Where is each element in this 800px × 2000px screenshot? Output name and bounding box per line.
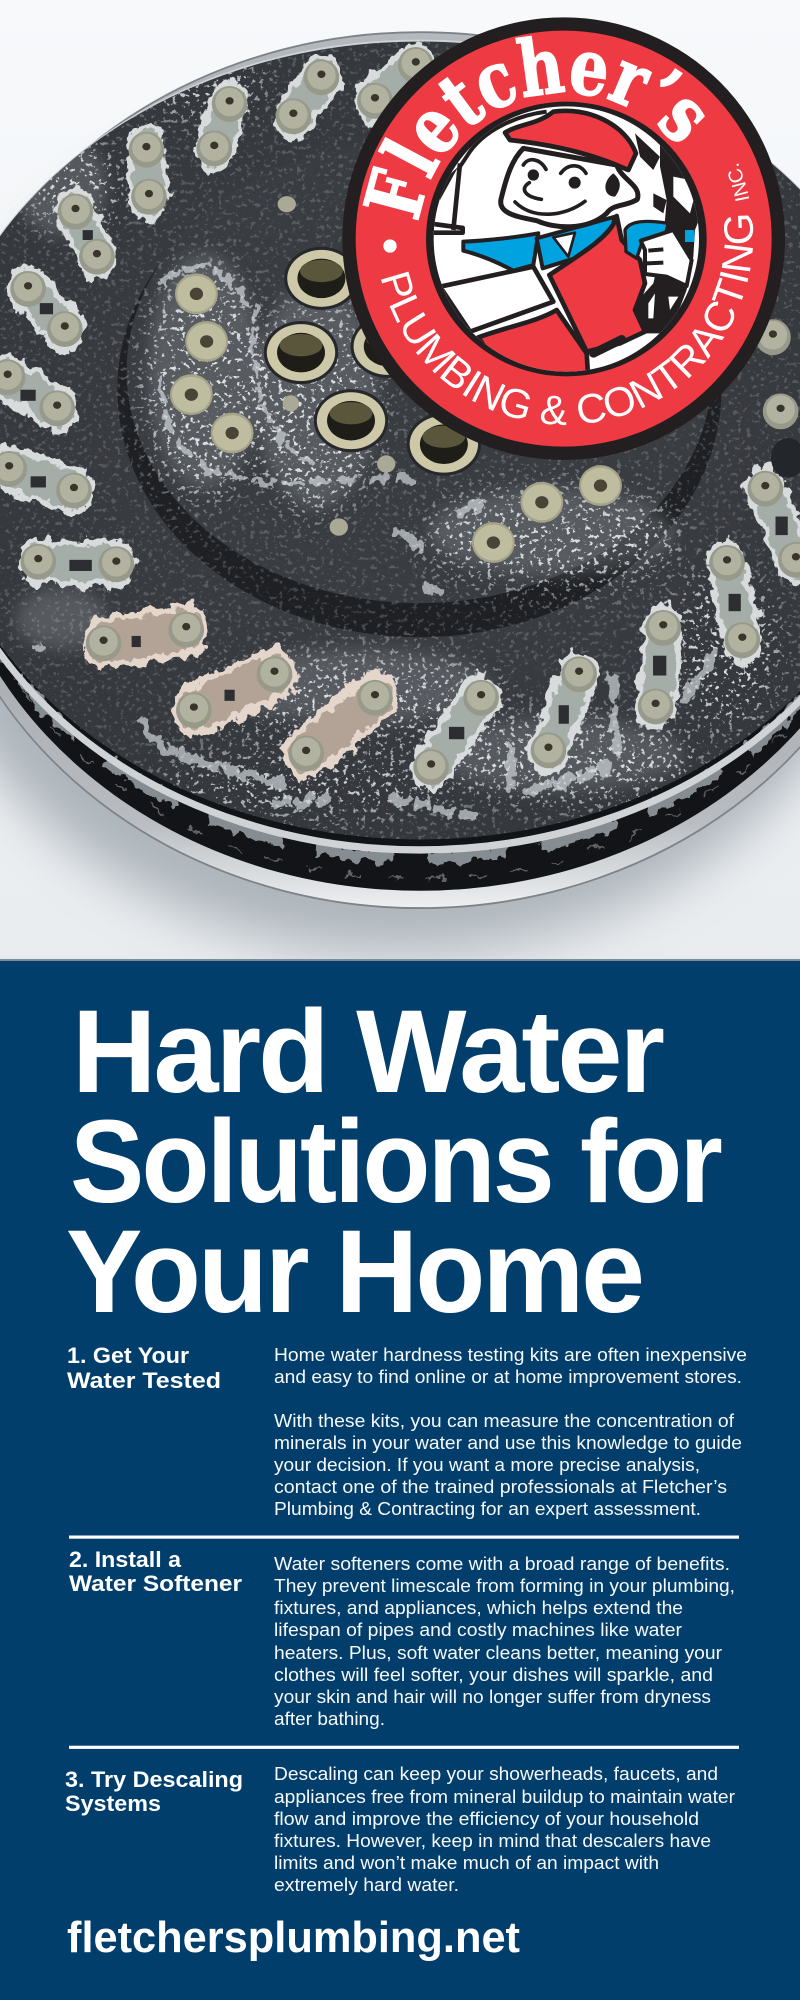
tab centre slots — [20, 230, 788, 739]
section 2 body text: lifespan of pipes and costly machines like water — [274, 1620, 682, 1640]
title — [66, 986, 722, 1338]
section 2 body text — [274, 1554, 735, 1729]
section 2 heading — [69, 1547, 242, 1596]
pale rim line — [0, 43, 800, 850]
mascot head — [501, 148, 638, 227]
section 1 body text: minerals in your water and use this knowledge to guide — [274, 1433, 742, 1453]
soft limescale haze — [15, 136, 684, 792]
Inc. small text: INC. — [728, 164, 749, 201]
section 2 heading: Water Softener — [69, 1571, 242, 1596]
section 3 body text: Descaling can keep your showerheads, faucets, and — [274, 1764, 718, 1784]
raised centre disc side — [117, 142, 721, 637]
section 1 body text: and easy to find online or at home improvement stores. — [274, 1367, 742, 1387]
mascot shoulder — [433, 163, 463, 233]
badge black outer ring — [342, 17, 785, 460]
mascot ear — [605, 173, 620, 197]
mascot arm upper — [460, 112, 547, 167]
dark nozzle at right edge — [771, 438, 800, 478]
mascot blue shirt left — [463, 233, 538, 271]
section 2 body text: clothes will feel softer, your dishes will sparkle, and — [274, 1665, 713, 1685]
section 2 body text: heaters. Plus, soft water cleans better, meaning your — [274, 1643, 722, 1663]
Plumbing & Contracting arched text: PLUMBING & CONTRACTING — [381, 216, 754, 426]
showerhead drawing — [0, 0, 800, 953]
section 3 heading: 3. Try Descaling — [65, 1767, 243, 1792]
showerhead face — [0, 41, 800, 839]
limescale speckle — [0, 0, 800, 866]
section 1 heading: 1. Get Your — [67, 1343, 189, 1368]
section 2 body text: They prevent limescale from forming in your plumbing, — [274, 1576, 735, 1596]
cast shadow — [0, 111, 800, 953]
mascot overalls — [549, 216, 645, 352]
mascot hand — [641, 230, 692, 286]
section 3 body text: flow and improve the efficiency of your household — [274, 1809, 699, 1829]
mascot hat — [505, 111, 636, 170]
mascot foot — [593, 339, 622, 353]
section 1 body text: Home water hardness testing kits are often inexpensive — [274, 1345, 747, 1365]
section 2 body text: your skin and hair will no longer suffer from dryness — [274, 1687, 711, 1707]
tiny pin nozzles — [278, 196, 395, 536]
mascot pants — [478, 310, 588, 380]
section 3 body text: extremely hard water. — [274, 1875, 459, 1895]
large spray holes — [264, 247, 481, 476]
mascot collar — [537, 217, 615, 268]
divider 1 — [69, 1536, 739, 1539]
section 3 heading — [65, 1767, 243, 1816]
nozzles — [0, 47, 800, 785]
section 1 heading — [67, 1343, 221, 1393]
photo background — [0, 0, 800, 970]
mascot wrench — [638, 145, 698, 334]
section 2 body text: after bathing. — [274, 1709, 385, 1729]
section 2 body text: Water softeners come with a broad range of benefits. — [274, 1554, 730, 1574]
dark lower rim band — [0, 43, 800, 891]
badge red ring — [356, 31, 772, 447]
mascot roundel — [426, 102, 713, 380]
section 1 heading: Water Tested — [67, 1368, 221, 1393]
chrome outer rim — [0, 32, 800, 908]
section 3 body text: appliances free from mineral buildup to maintain water — [274, 1787, 735, 1807]
title: Hard Water — [72, 986, 664, 1118]
nozzle tabs — [8, 65, 796, 767]
title: Your Home — [66, 1206, 642, 1338]
divider 2 — [69, 1746, 739, 1749]
limescale deposits — [36, 267, 714, 817]
section 1 body text: your decision. If you want a more precise analysis, — [274, 1455, 700, 1475]
photo: hard water scaled showerhead — [0, 0, 800, 970]
section 1 body text: Plumbing & Contracting for an expert assessment. — [274, 1499, 701, 1519]
section 3 body text — [274, 1764, 735, 1895]
section 1 body text — [274, 1345, 747, 1519]
Fletcher's arched wordmark: Fletcher’s — [362, 36, 705, 220]
mascot white cuff spots — [635, 133, 667, 213]
mascot right sleeve — [625, 221, 668, 258]
small rings on centre disc — [170, 273, 622, 563]
logo: Fletcher's Plumbing & Contracting badge — [342, 17, 785, 460]
section 2 heading: 2. Install a — [69, 1547, 182, 1572]
website url: fletchersplumbing.net — [67, 1913, 520, 1962]
section 1 body text: With these kits, you can measure the concentration of — [274, 1411, 735, 1431]
section 3 body text: fixtures. However, keep in mind that descalers have — [274, 1831, 711, 1851]
section 3 heading: Systems — [65, 1791, 161, 1816]
white dot separator — [383, 239, 397, 253]
section 3 body text: limits and won’t make much of an impact with — [274, 1853, 659, 1873]
raised centre disc top — [127, 139, 712, 603]
title: Solutions for — [70, 1096, 722, 1228]
navy text panel — [0, 959, 800, 2000]
section 2 body text: fixtures, and appliances, which helps extend the — [274, 1598, 683, 1618]
section 1 body text: contact one of the trained professionals at Fletcher’s — [274, 1477, 727, 1497]
mascot lower sleeve white — [440, 267, 553, 332]
mascot face — [515, 160, 586, 214]
